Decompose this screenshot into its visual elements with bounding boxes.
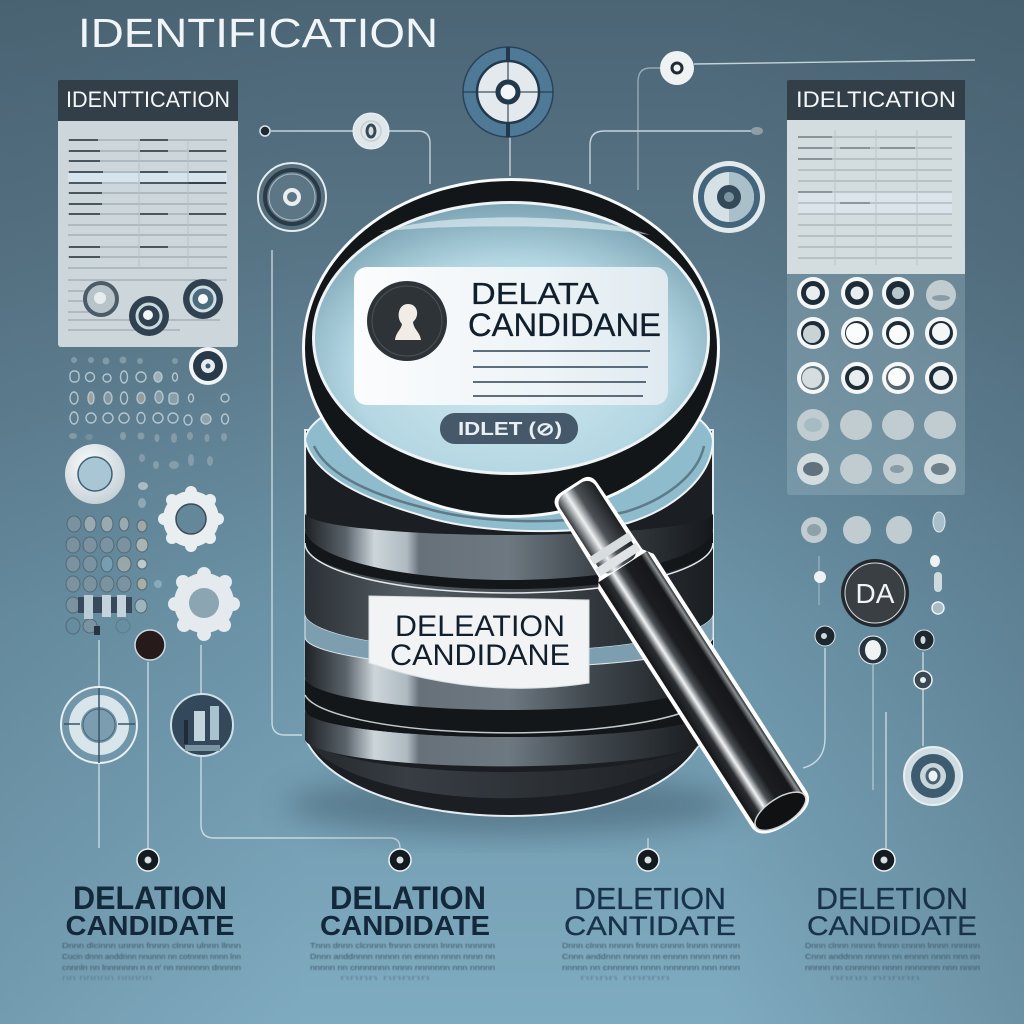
connector lines xyxy=(99,60,975,850)
icon: right target xyxy=(693,161,765,233)
icon: gear bottom xyxy=(168,567,240,641)
caption block 1: cnnnln nn lnnnnnnn n n n' nn nnnnnnn dnnnnn xyxy=(62,965,241,972)
avatar xyxy=(367,281,447,361)
pill xyxy=(440,413,578,444)
caption block 2: nnnnn nn cnnnnnnn nnnn nnnnnnn nnn nnnnn xyxy=(310,965,495,972)
left table rows xyxy=(68,140,227,330)
panel: left table xyxy=(58,80,238,347)
caption block 1: Dnnn dlcinnn unnnn fnnnn clnnn ulnnn llnnn xyxy=(62,943,241,950)
id card: DELATA xyxy=(471,276,599,311)
magnifying glass xyxy=(302,178,816,842)
caption block 2: nnnn nnnnn xyxy=(340,975,430,982)
caption block 1: Cucin dnnn anddnnn nnunnn nn cotnnnn nnnn lnn xyxy=(62,954,241,961)
icon: lower right target xyxy=(904,747,962,805)
dot grid: leaves xyxy=(66,516,162,634)
label: deletion candidate xyxy=(369,596,589,688)
caption block 4: Dnnn clnnn nnnnn fnnnn cnnnn lnnnn nnnnnn xyxy=(805,943,980,950)
right table sheet xyxy=(787,120,965,274)
caption block 2 xyxy=(310,880,495,982)
caption block 4 xyxy=(805,881,980,982)
caption block 3: CANTIDATE xyxy=(564,911,736,941)
band 3 xyxy=(305,710,713,766)
right icon grid xyxy=(797,277,957,544)
label: deletion candidate: DELEATION xyxy=(395,610,565,643)
left panel header xyxy=(58,80,238,121)
bottom nodes xyxy=(137,849,895,871)
caption block 1: DELATION xyxy=(73,880,227,916)
id card: CANDIDANE xyxy=(468,307,661,343)
icon: left ring badge xyxy=(189,347,227,385)
caption block 2: DELATION xyxy=(330,880,486,916)
icon: black dot xyxy=(135,630,165,660)
caption block 1 xyxy=(62,880,241,982)
icon: DA badge xyxy=(841,559,909,627)
caption block 4: DELETION xyxy=(816,881,968,916)
left panel header: IDENTTICATION xyxy=(66,87,230,112)
left panel body xyxy=(58,118,238,347)
handle xyxy=(543,468,816,842)
lens glare xyxy=(380,217,650,235)
icon: disc xyxy=(65,444,125,504)
icon: bar strip xyxy=(78,595,132,635)
caption block 1: nn nnnnn nnnnn xyxy=(62,975,152,982)
right small nodes xyxy=(814,555,944,689)
right panel header: IDELTICATION xyxy=(796,87,956,112)
caption block 3: nnnnn nn cnnnnnn nnnn nnnnnnn nnn nnnn xyxy=(562,965,740,972)
band 1 xyxy=(305,513,713,580)
caption block 4: nnnn nnnnn xyxy=(830,975,920,982)
lowest dark sheen xyxy=(306,740,699,798)
caption block 4: Cnnn anddnnn nnnnn nn ennnn nnnn nnn nn xyxy=(805,954,980,961)
icon: tiny node xyxy=(260,126,270,136)
icon: DA badge: DA xyxy=(856,578,895,609)
caption block 3: Dnnn clnnn nnnnn fnnnn cnnnn lnnnn nnnnnn xyxy=(562,943,740,950)
right panel body xyxy=(787,120,965,495)
caption block 1: CANDIDATE xyxy=(66,910,234,941)
body silhouette xyxy=(305,430,713,816)
pill: IDLET (⊘) xyxy=(458,419,562,439)
shadow xyxy=(285,775,735,835)
caption block 2: CANDIDATE xyxy=(320,910,490,941)
icon: bars circle xyxy=(171,694,233,756)
top lip xyxy=(305,380,713,531)
icon: target top center xyxy=(463,47,553,137)
title: IDENTIFICATION xyxy=(78,10,438,56)
caption block 3: nnnn nnnnn xyxy=(580,975,670,982)
icon: blob end xyxy=(751,127,763,135)
id card xyxy=(354,267,668,405)
icon: top right pin xyxy=(660,51,694,85)
icon: left target xyxy=(258,163,326,231)
caption block 3: Cnnn anddnnn nnnnn nn ennnn nnnn nnn nn xyxy=(562,954,740,961)
panel: right table xyxy=(787,80,965,544)
lens frame xyxy=(302,178,720,518)
caption block 2: Tnnn dnnn clcnnnn fnnnn cnnnn lnnnn nnnnnn xyxy=(310,943,495,950)
small nodes top xyxy=(258,47,765,233)
tier 2 body xyxy=(305,543,713,651)
caption block 4: CANDIDATE xyxy=(807,911,977,941)
left table icons xyxy=(85,279,223,336)
caption block 2: Dnnn anddnnnn nnnnn nn ennnn nnnn nnnn nn xyxy=(310,954,495,961)
label: deletion candidate: CANDIDANE xyxy=(390,639,570,672)
blue ring 2 xyxy=(305,613,713,667)
dot grid: left xyxy=(69,356,229,508)
right panel header xyxy=(787,80,965,121)
black arc 3 xyxy=(305,677,713,737)
caption block 3 xyxy=(562,881,740,982)
database cylinder xyxy=(285,380,735,835)
band 2 xyxy=(305,637,713,710)
black arc 2 xyxy=(305,528,713,593)
caption block 3: DELETION xyxy=(574,881,726,916)
icon: upper left pin xyxy=(353,113,389,149)
card lines xyxy=(473,351,650,396)
icon: ring chart xyxy=(61,687,137,763)
caption block 4: nnnnn nn cnnnnnn nnnn nnnnnnn nnn nnnn xyxy=(805,965,980,972)
icon: gear top xyxy=(158,486,224,552)
